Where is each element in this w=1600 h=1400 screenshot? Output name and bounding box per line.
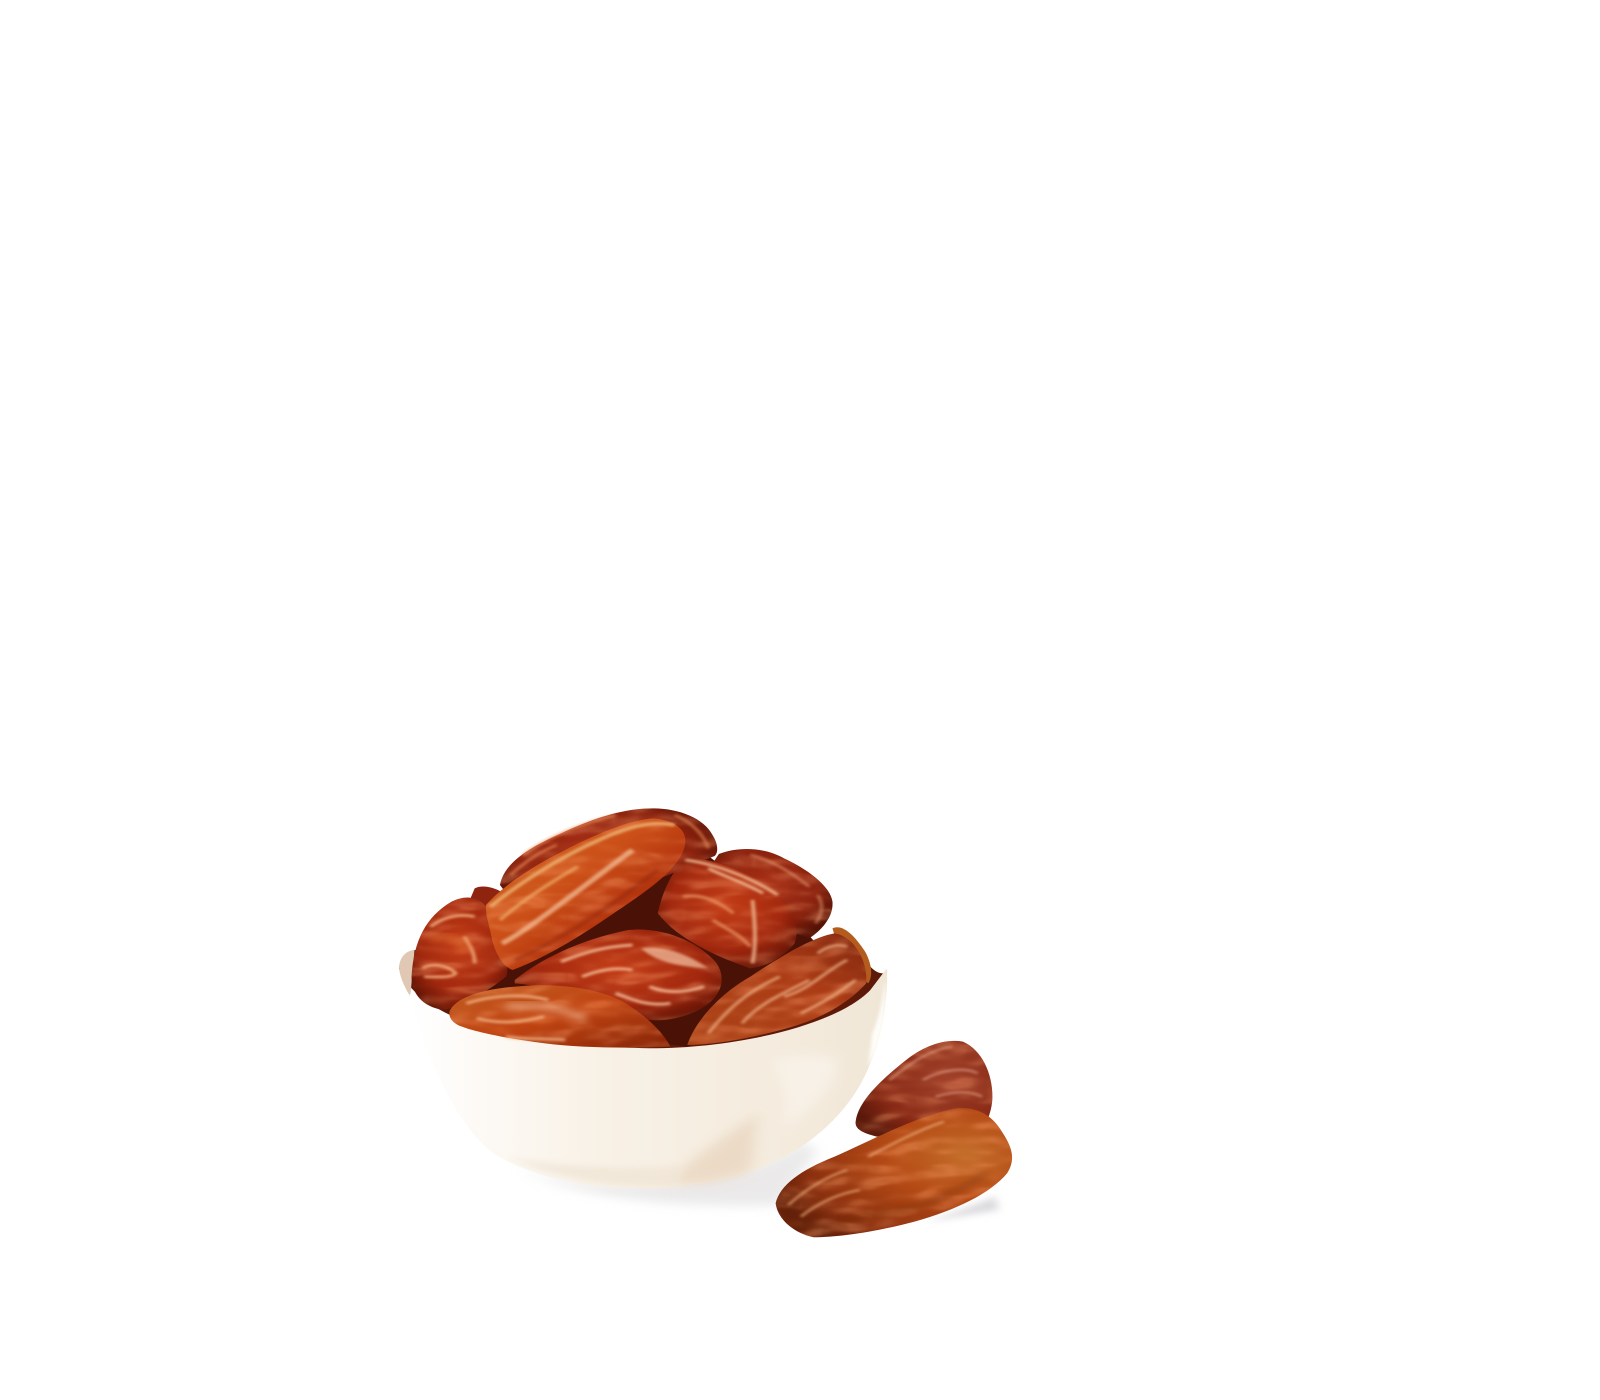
date: front bottom [449,985,670,1048]
bowl body [409,968,887,1188]
bowl [399,950,887,1188]
date: bowl centre [515,930,722,1020]
shadow under bowl and dates [515,1142,999,1222]
bowl shading [670,1113,759,1184]
date: loose front [776,1108,1012,1237]
bowl interior [399,950,887,1050]
date: centre right [658,858,797,968]
date: back top [500,808,717,907]
date: loose back [856,1041,992,1137]
date: left [412,887,507,1010]
date: back right [708,849,833,938]
date: lower right [687,933,866,1045]
date: main large [486,818,685,970]
dark gaps between dates [431,837,856,1047]
date: back orange sliver [832,927,871,983]
